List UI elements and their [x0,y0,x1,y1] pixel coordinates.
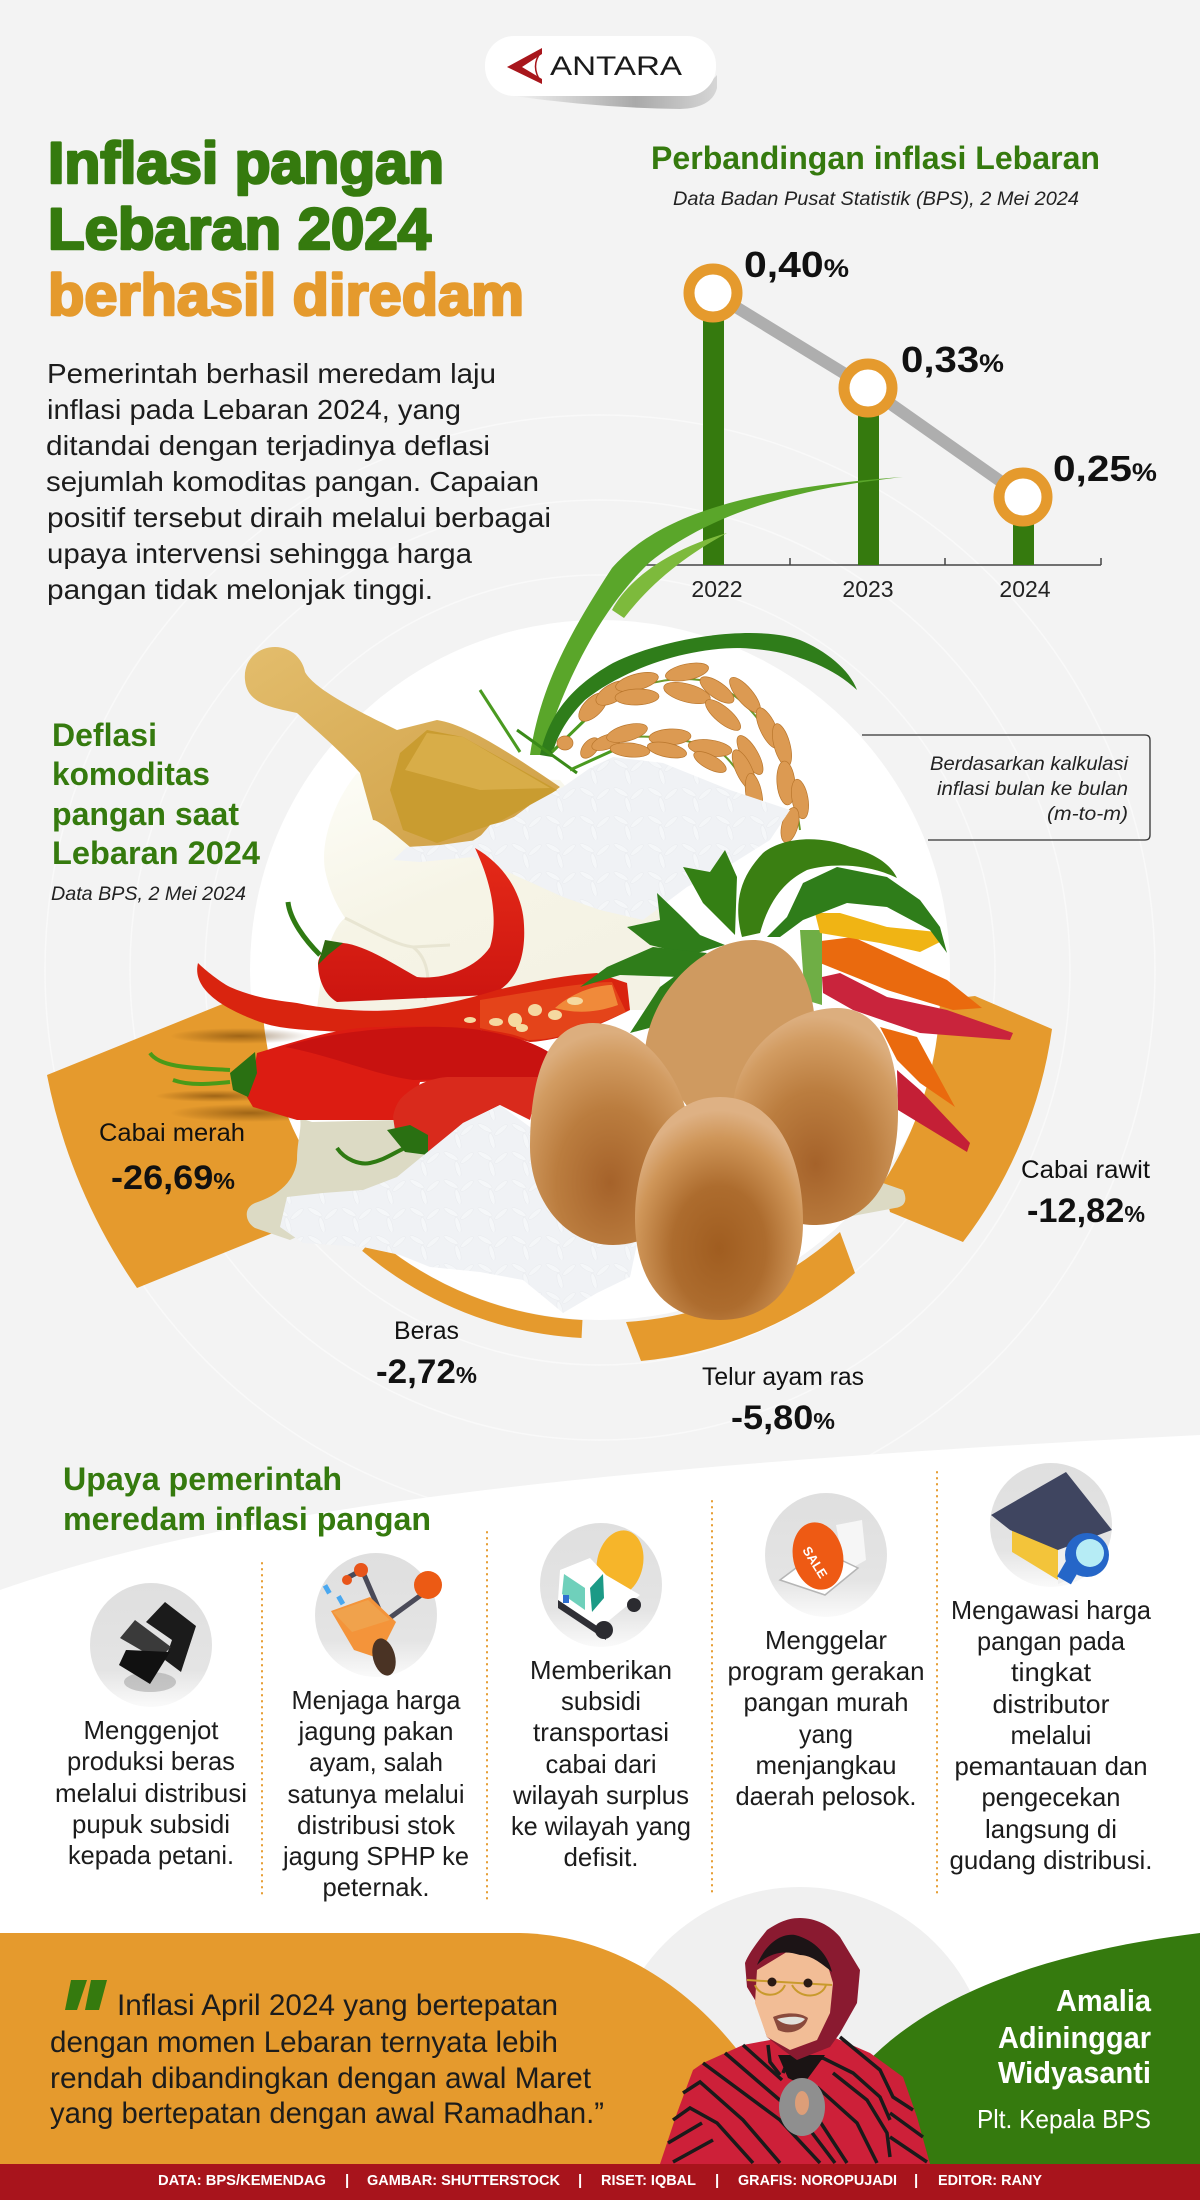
quote text [50,1989,604,2130]
mouth [773,2013,808,2032]
heading: deflasi komoditas: Lebaran 2024 [52,835,260,871]
intro paragraph: upaya intervensi sehingga harga [47,538,472,569]
heading: upaya pemerintah: Upaya pemerintah [63,1461,342,1497]
donut segments [47,996,1052,1361]
red chilies [150,848,630,1163]
segment: cabai merah [47,1003,300,1288]
intro paragraph: ditandai dengan terjadinya deflasi [46,430,490,461]
year labels: 2023 [842,576,894,602]
text: cabai dari [546,1749,656,1779]
text: yang [799,1719,853,1749]
text: distribusi stok [297,1810,456,1840]
text: subsidi [561,1686,641,1716]
label: telur ayam ras: -5,80% [731,1399,835,1437]
quote [50,1980,604,2130]
value labels: 0,25 % [1053,448,1157,489]
text: wilayah surplus [512,1780,689,1810]
text: pangan murah [744,1687,908,1717]
segment: beras [368,1244,582,1329]
right chilies [800,913,1013,1152]
panel: quote background [0,1933,745,2170]
rice plant leaves [480,477,903,773]
eggs [530,940,898,1320]
text: Menggelar [765,1625,887,1655]
speaker name: Widyasanti [998,2055,1151,2090]
body [660,2037,930,2164]
callout: m-to-m note [862,735,1150,840]
label: cabai merah: -26,69 % [111,1159,235,1197]
intro paragraph: Pemerintah berhasil meredam laju [47,358,496,389]
rice pile: upper [393,757,790,920]
quote text: Inflasi April 2024 yang bertepatan [117,1989,558,2022]
quote text: yang bertepatan dengan awal Ramadhan.” [50,2097,604,2130]
icon: sale tag [765,1493,887,1617]
text: melalui distribusi [55,1778,247,1808]
speaker name: Adininggar [998,2020,1151,2055]
text: ayam, salah [309,1747,443,1777]
text: pengecekan [982,1782,1120,1812]
speaker name: Amalia [1056,1983,1152,2018]
text: jagung pakan [298,1716,454,1746]
intro paragraph: inflasi pada Lebaran 2024, yang [47,394,461,425]
portrait: Amalia [660,1918,930,2164]
text [728,1625,924,1811]
icon: warehouse with magnifier [990,1463,1112,1587]
hijab [745,1918,860,2060]
deflation source: Data BPS, 2 Mei 2024 [51,884,246,905]
chart source: Data Badan Pusat Statistik (BPS), 2 Mei 2024 [673,189,1079,210]
text: defisit. [564,1842,638,1872]
text: ke wilayah yang [511,1811,691,1841]
icon: truck with coin [540,1523,662,1647]
glasses [747,1980,832,1996]
title: Lebaran 2024 [48,197,431,262]
text: jagung SPHP ke [282,1841,469,1871]
text [950,1595,1152,1875]
heading: upaya pemerintah [63,1461,431,1537]
icon: sale tag: SALE [799,1544,831,1581]
column 1: produksi beras [55,1583,247,1870]
column 5: pengawasan gudang [950,1463,1152,1875]
value labels: 0,40 % [744,244,849,285]
text: langsung di [985,1814,1117,1844]
curved chili [288,902,320,955]
text: menjangkau [756,1750,896,1780]
speaker name: Plt. Kepala BPS [977,2104,1151,2134]
label: beras: Beras [394,1317,459,1345]
text [282,1685,469,1902]
white lower section [0,1435,1200,2200]
segment: cabai rawit [883,996,1052,1242]
text: satunya melalui [288,1779,464,1809]
label: cabai merah [99,1119,245,1197]
quote text: dengan momen Lebaran ternyata lebih [50,2026,558,2059]
callout: m-to-m note: (m-to-m) [1047,804,1128,825]
label: beras: -2,72% [376,1353,477,1391]
face [755,1950,833,2050]
footer credits: RISET: IQBAL [601,2172,696,2189]
small chili [337,1147,407,1163]
chart heading: Perbandingan inflasi Lebaran [651,140,1100,176]
segment: telur [626,1232,855,1361]
column 2: harga jagung [282,1553,469,1902]
footer credits [0,2164,1200,2200]
value labels: 0,33 % [901,339,1004,380]
label: cabai rawit: -12,82% [1027,1192,1145,1230]
grey circle behind portrait [609,1887,991,2200]
text: tingkat [1011,1657,1092,1687]
title: Inflasi pangan [48,131,444,196]
value labels [744,244,1157,489]
intro paragraph: positif tersebut diraih melalui berbagai [47,502,551,533]
year labels [691,576,1051,602]
footer credits: | [345,2172,349,2189]
title [48,131,524,328]
text: Memberikan [530,1655,672,1685]
text: Menjaga harga [292,1685,461,1715]
cream bag: lower [247,1118,905,1240]
label: cabai rawit: Cabai rawit [1021,1156,1150,1184]
neck scarf [778,2055,825,2085]
panel: name background [860,1933,1200,2170]
text: daerah pelosok. [736,1781,916,1811]
title: berhasil diredam [48,263,524,328]
footer credits: | [715,2172,719,2189]
illustration: food group [150,477,1013,1320]
scoop [245,647,560,847]
heading: deflasi komoditas: Deflasi [52,717,157,753]
cream bag: upper [317,773,660,1010]
trend line [713,293,1023,497]
heading: deflasi komoditas: komoditas [52,756,210,792]
bars [703,293,1034,565]
quote text: rendah dibandingkan dengan awal Maret [50,2062,592,2095]
intro paragraph: pangan tidak melonjak tinggi. [47,574,433,605]
text: pangan pada [977,1626,1126,1656]
long chili [197,963,630,1042]
text: program gerakan [728,1656,924,1686]
text: pupuk subsidi [72,1809,230,1839]
label: telur ayam ras: Telur ayam ras [702,1363,864,1391]
label: cabai merah: Cabai merah [99,1119,245,1147]
text: Menggenjot [84,1715,219,1745]
heading: deflasi komoditas [52,717,260,871]
text [55,1715,247,1870]
callout: m-to-m note: inflasi bulan ke bulan [937,779,1128,800]
text: produksi beras [67,1746,235,1776]
axis [635,558,1101,565]
text: kepada petani. [68,1840,234,1870]
label: telur ayam ras [702,1363,864,1437]
footer credits: DATA: BPS/KEMENDAG [158,2172,326,2189]
text [511,1655,691,1872]
white circle behind food [250,620,950,1320]
herb leaves [580,839,947,1033]
icon: wheelbarrow [315,1553,442,1678]
text: transportasi [533,1717,669,1747]
logo: ANTARA: ANTARA [550,51,682,81]
chili shadows [155,1028,330,1122]
chart: Perbandingan inflasi Lebaran [635,140,1157,602]
speaker name [977,1983,1152,2134]
label: beras [376,1317,477,1391]
text: peternak. [322,1872,430,1902]
callout: m-to-m note: Berdasarkan kalkulasi [930,754,1129,775]
text: gudang distribusi. [950,1845,1152,1875]
heading: upaya pemerintah: meredam inflasi pangan [63,1501,431,1537]
rice grains: panicle [557,660,811,844]
rice pile: lower [280,1105,640,1313]
text: Mengawasi harga [951,1595,1152,1625]
label: cabai rawit [1021,1156,1150,1230]
text: melalui [1010,1720,1092,1750]
intro paragraph [46,358,551,605]
hair band [757,1935,832,1972]
year labels: 2024 [999,576,1051,602]
column 3: subsidi transportasi [511,1523,691,1872]
footer credits: GAMBAR: SHUTTERSTOCK [367,2172,560,2189]
logo: ANTARA [485,36,717,109]
markers [689,269,1047,521]
text: pemantauan dan [954,1751,1148,1781]
column 4: gerakan pangan murah [728,1493,924,1811]
large chili [150,1053,230,1084]
text: distributor [992,1689,1110,1719]
brooch [779,2078,825,2136]
year labels: 2022 [691,576,743,602]
footer credits: GRAFIS: NOROPUJADI [738,2172,897,2189]
intro paragraph: sejumlah komoditas pangan. Capaian [46,466,539,497]
footer credits: | [578,2172,582,2189]
heading: deflasi komoditas: pangan saat [52,796,239,832]
icon: quote mark [65,1980,107,2010]
icon: black blocks [90,1583,212,1707]
footer credits: EDITOR: RANY [938,2172,1042,2189]
footer credits: | [914,2172,918,2189]
